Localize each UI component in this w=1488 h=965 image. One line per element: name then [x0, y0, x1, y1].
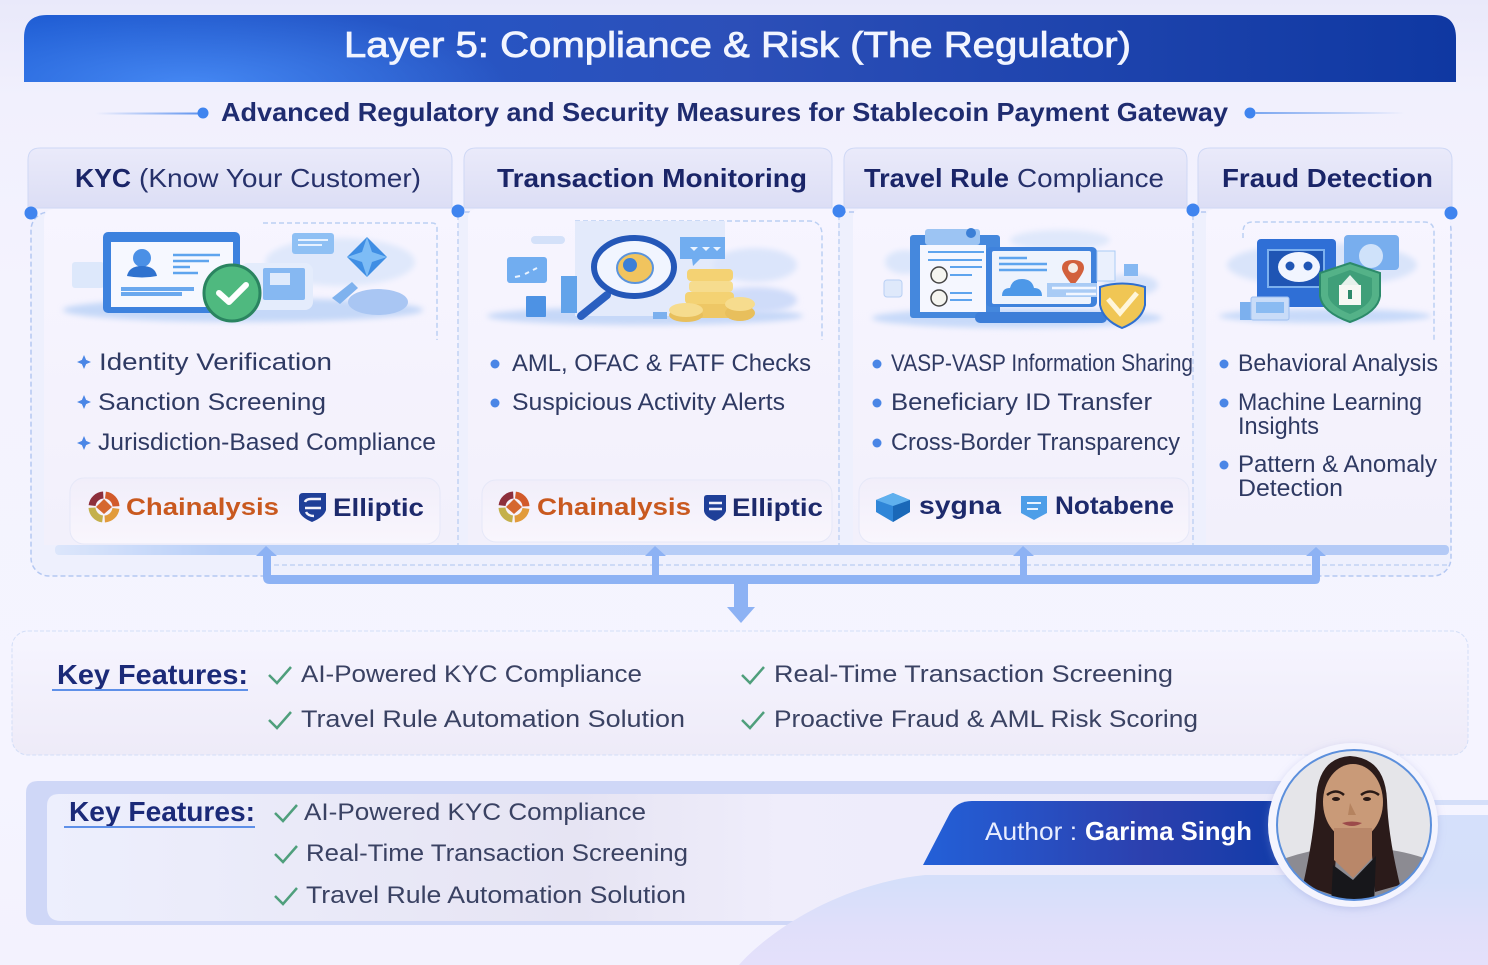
heading: Key Features: Key Features: — [69, 796, 255, 827]
Transaction Monitoring bullet list: AML, OFAC & FATF Checks — [512, 350, 811, 377]
logo: sygna — [876, 492, 1002, 522]
KYC panel body — [44, 209, 458, 545]
title banner: Layer 5: Compliance & Risk (The Regulator) — [344, 24, 1131, 65]
KYC heading tab — [28, 148, 452, 208]
feature checks: AI-Powered KYC Compliance — [301, 661, 642, 688]
title banner — [24, 15, 1456, 82]
Transaction Monitoring bullet list — [490, 350, 811, 416]
Fraud Detection bullet list: Detection — [1238, 475, 1343, 502]
Transaction Monitoring heading tab — [464, 148, 832, 208]
KYC bullet list: Identity Verification — [99, 349, 332, 376]
panel: KYC — [28, 148, 458, 545]
feature checks: Travel Rule Automation Solution — [306, 882, 686, 909]
Transaction Monitoring heading tab: Transaction Monitoring — [497, 163, 807, 193]
Fraud Detection bullet list: Pattern & Anomaly — [1238, 451, 1437, 478]
logo: Elliptic: Elliptic — [333, 494, 424, 522]
icon: identity card with green check — [63, 223, 437, 340]
KYC heading tab: (Know Your Customer) — [139, 163, 421, 193]
logo: Elliptic — [704, 494, 823, 522]
panel: Transaction Monitoring — [464, 148, 838, 545]
Travel Rule bullet list: Beneficiary ID Transfer — [891, 389, 1152, 416]
icon: monitor with lock and green shield — [1219, 222, 1434, 340]
feature checks: Real-Time Transaction Screening — [774, 661, 1173, 688]
Transaction Monitoring bullet list: Suspicious Activity Alerts — [512, 389, 785, 416]
feature checks: Proactive Fraud & AML Risk Scoring — [774, 706, 1198, 733]
Fraud Detection heading tab: Fraud Detection — [1222, 163, 1433, 193]
KYC heading tab: KYC — [75, 163, 131, 193]
Fraud Detection heading tab — [1198, 148, 1452, 208]
logo: Notabene: Notabene — [1055, 492, 1174, 520]
KYC bullet list: Jurisdiction-Based Compliance — [98, 429, 436, 456]
Fraud Detection bullet list — [1220, 350, 1438, 502]
arrows: bracket connecting panels to key features — [256, 546, 1326, 623]
Travel Rule panel body — [853, 209, 1192, 545]
Transaction Monitoring panel body — [468, 209, 838, 545]
Travel Rule bullet list: Cross-Border Transparency — [891, 429, 1180, 456]
KYC vendor logos — [70, 478, 440, 544]
feature checks: Travel Rule Automation Solution — [301, 706, 685, 733]
subtitle with side rules: Advanced Regulatory and Security Measures for Stablecoin Payment Gateway — [221, 97, 1229, 127]
Travel Rule heading tab — [844, 148, 1187, 208]
connector band under panels — [55, 545, 1449, 555]
logo: sygna: sygna — [919, 492, 1002, 520]
author ribbon: Garima Singh — [1085, 816, 1252, 846]
panel: lower key features — [26, 781, 1488, 925]
feature checks — [269, 661, 1198, 733]
author ribbon: Author : — [985, 818, 1077, 846]
Transaction Monitoring vendor logos — [482, 480, 832, 542]
feature checks — [275, 799, 688, 909]
panel: Travel Rule Compliance — [844, 148, 1193, 545]
column divider dashes — [274, 215, 1450, 565]
Fraud Detection bullet list: Behavioral Analysis — [1238, 350, 1438, 377]
feature checks: AI-Powered KYC Compliance — [304, 799, 646, 826]
background swoosh bottom right — [739, 815, 1488, 965]
feature checks: Real-Time Transaction Screening — [306, 840, 688, 867]
Fraud Detection bullet list: Insights — [1238, 413, 1319, 440]
panel: key features strip — [12, 631, 1468, 755]
heading: Key Features: Key Features: — [57, 659, 248, 690]
logo: Chainalysis: Chainalysis — [537, 494, 691, 521]
author portrait — [1268, 743, 1440, 907]
panel: Fraud Detection — [1198, 148, 1452, 545]
Travel Rule heading tab: Travel Rule — [864, 163, 1009, 193]
Travel Rule bullet list — [872, 350, 1193, 456]
logo: Elliptic — [299, 493, 424, 522]
connector dots — [24, 204, 1458, 220]
outer dashed frame around panels — [31, 212, 1451, 576]
author ribbon — [923, 801, 1295, 865]
Fraud Detection bullet list: Machine Learning — [1238, 389, 1422, 416]
icon: clipboard, laptop and gold shield — [872, 228, 1162, 328]
logo: Elliptic: Elliptic — [732, 494, 823, 522]
KYC bullet list: Sanction Screening — [98, 389, 326, 416]
KYC bullet list — [77, 349, 436, 456]
Travel Rule vendor logos — [859, 478, 1189, 543]
icon: magnifying glass over coins — [487, 221, 822, 340]
Travel Rule heading tab: Compliance — [1017, 163, 1164, 193]
logo: Chainalysis: Chainalysis — [126, 494, 279, 521]
Travel Rule bullet list: VASP-VASP Information Sharing — [891, 350, 1193, 377]
Fraud Detection panel body — [1206, 209, 1450, 545]
